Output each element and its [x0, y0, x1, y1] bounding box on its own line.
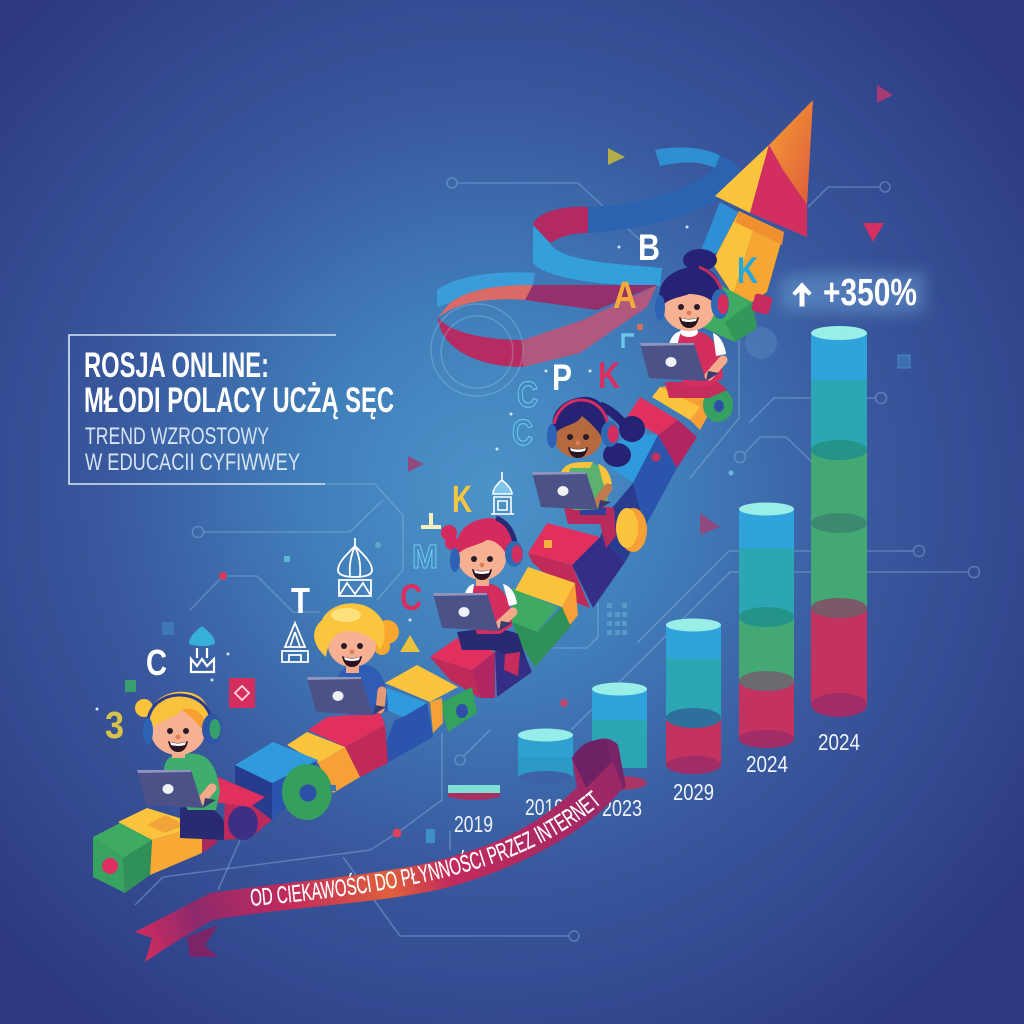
icon: up arrow: [793, 283, 811, 306]
top blocks: [660, 385, 722, 430]
floating letters: K: [737, 250, 758, 291]
block: red with circle: [215, 777, 272, 840]
icon: red diamond tile: [229, 678, 255, 708]
kid 3: [433, 518, 526, 676]
banner ribbon: [135, 738, 626, 962]
building block staircase: [93, 385, 722, 893]
circuit lines: [135, 178, 980, 941]
callout: +350%: +350%: [823, 272, 917, 314]
floating letters: C: [517, 374, 538, 415]
faint disc: [745, 327, 777, 359]
year labels: 2023: [602, 795, 642, 821]
year labels: 2019: [525, 794, 564, 820]
floating letters: A: [613, 275, 637, 317]
block: yellow: [515, 567, 578, 625]
banner ribbon: OD CIEKAWOŚCI DO PŁYNNOŚCI PRZEZ INTERNET: [250, 790, 600, 906]
icon: small white tower: [491, 472, 514, 514]
big arrow: [712, 100, 813, 305]
kid 5: [640, 249, 729, 398]
floating letters: K: [598, 355, 620, 396]
year labels: 2024: [818, 729, 860, 755]
kid 2: [307, 603, 399, 715]
floating letters: T: [291, 580, 310, 621]
floating letters: K: [452, 479, 472, 521]
bar 2023: [592, 682, 647, 790]
floating letters: C: [400, 577, 422, 618]
title: ROSJA ONLINE:: [84, 346, 269, 385]
block: blue lower: [235, 742, 318, 820]
floating letters: P: [552, 357, 572, 398]
block: red step: [308, 712, 388, 777]
block: green first: [93, 823, 152, 893]
icon: blue dome: [189, 617, 215, 672]
block: yellow step lower: [287, 732, 360, 793]
bar 2029: [666, 618, 721, 774]
wheel: yellow: [616, 508, 647, 552]
title: MŁODI POLACY UCŻĄ SĘC: [84, 381, 394, 420]
callout: +350%: [780, 271, 925, 315]
block: blue step: [380, 688, 433, 763]
floating letters: C: [146, 642, 167, 683]
bar 2019: [448, 785, 500, 800]
icon: spire: [282, 623, 308, 662]
floating letters: C: [512, 412, 533, 453]
block: yellow first: [118, 808, 217, 875]
block: red middle: [528, 523, 625, 608]
title: [84, 346, 394, 420]
block: red lower: [430, 638, 532, 698]
floating letters: [105, 227, 758, 747]
year labels: 2029: [673, 779, 714, 805]
title frame: [69, 335, 336, 484]
backpack green cone: [702, 285, 773, 342]
bar 2024: [739, 502, 794, 748]
year labels: 2024: [746, 751, 788, 777]
wheel: top green: [703, 388, 733, 422]
swirling ribbon: [431, 148, 741, 396]
wheel: small green: [440, 687, 477, 732]
kid 1: [135, 692, 224, 840]
floating letters: M: [412, 538, 438, 575]
bar 2024 tallest: [811, 326, 867, 717]
block: green: [512, 588, 572, 667]
floating letters: B: [638, 227, 660, 268]
subtitle: W EDUCACII CYFIWWEY: [85, 449, 300, 476]
subtitle: TREND WZROSTOWY: [85, 423, 269, 450]
bar 2019 second: [518, 728, 573, 785]
year labels: [454, 729, 860, 837]
year labels: 2019: [454, 811, 493, 837]
block: yellow step: [385, 665, 458, 733]
subtitle: [85, 423, 300, 476]
wheel: big green: [282, 764, 332, 820]
small shapes: [96, 85, 910, 843]
block: blue: [600, 433, 677, 562]
bar chart: [448, 326, 867, 800]
floating letters: 3: [105, 705, 124, 747]
block: red upper: [627, 397, 697, 468]
icon: onion dome large: [338, 538, 372, 596]
kid 4: [532, 397, 645, 548]
